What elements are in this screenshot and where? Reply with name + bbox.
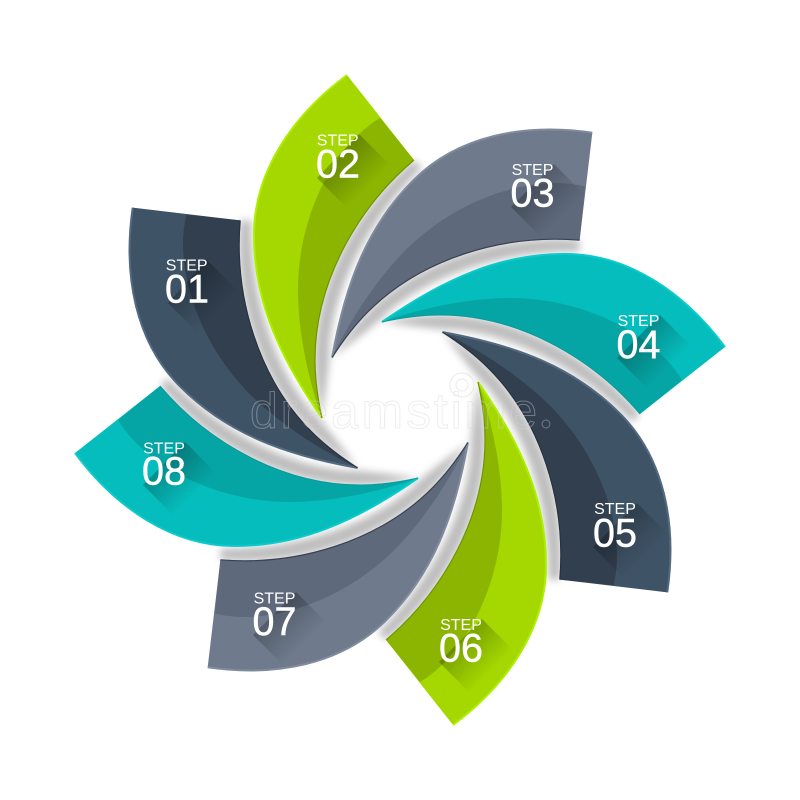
panel: step 04 xyxy=(382,254,725,414)
label: step 08: STEP xyxy=(143,440,185,457)
label: step 07: 07 xyxy=(253,600,296,644)
label: step 03: 03 xyxy=(511,172,554,216)
panel: step 03 xyxy=(331,128,592,358)
panel: step 07 xyxy=(208,442,469,672)
label: step 04: 04 xyxy=(617,323,660,367)
panel: step 02 xyxy=(254,75,414,418)
label: step 06: 06 xyxy=(439,627,483,671)
panel: step 05 xyxy=(442,331,672,592)
panel: step 06 xyxy=(386,382,546,725)
label: step 07: STEP xyxy=(254,590,295,607)
faint stock-image mark across the center: dreamstime xyxy=(250,383,537,439)
panel: step 08 xyxy=(75,386,418,546)
label: step 08: 08 xyxy=(142,450,186,494)
label: step 02: STEP xyxy=(317,132,359,149)
label: step 06: STEP xyxy=(440,617,482,634)
label: step 05: 05 xyxy=(593,512,637,556)
label: step 04: STEP xyxy=(618,313,659,330)
label: step 01: 01 xyxy=(165,268,209,312)
blade drop shadows xyxy=(160,160,640,640)
label: step 02: 02 xyxy=(316,142,360,186)
label: step 05: STEP xyxy=(594,501,636,518)
label: step 01: STEP xyxy=(166,258,208,274)
panel: step 01 xyxy=(128,208,358,469)
label: step 03: STEP xyxy=(512,162,553,179)
